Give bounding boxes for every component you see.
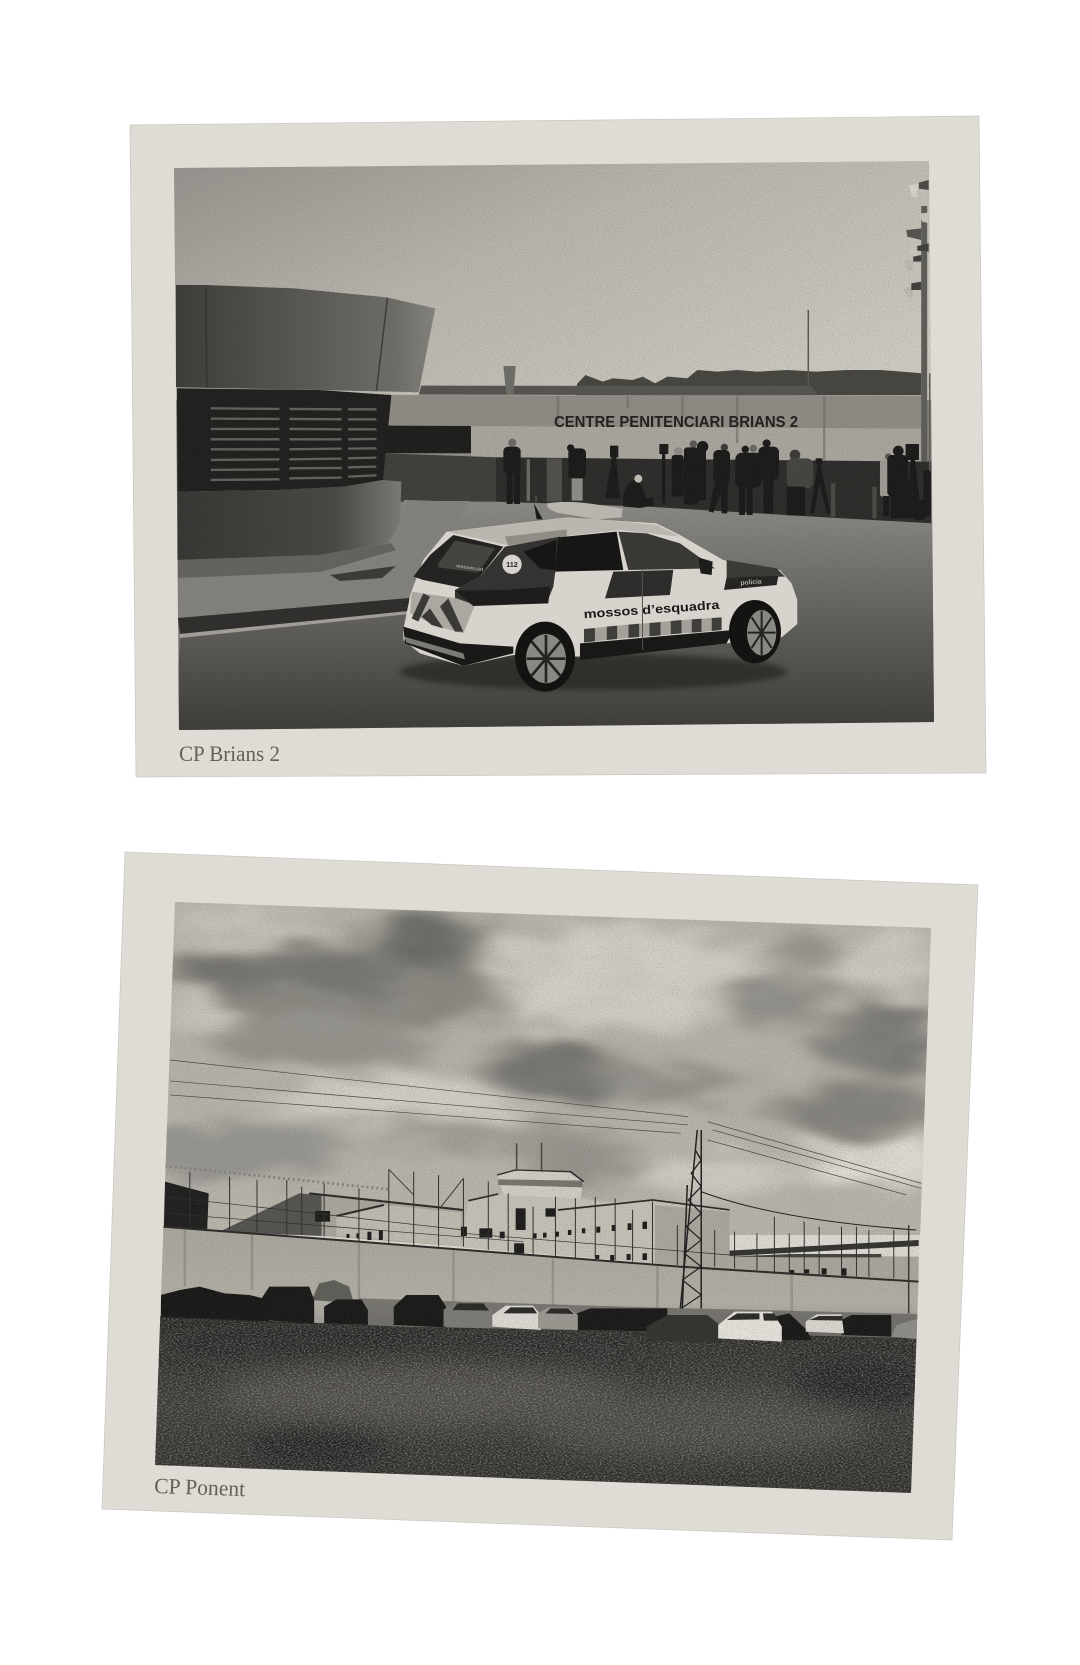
parked white car	[492, 1306, 541, 1330]
grain	[150, 895, 940, 1505]
rear wheel	[515, 622, 575, 692]
entrance dark band	[496, 457, 931, 523]
mirror	[698, 557, 713, 575]
badge: 112	[502, 555, 522, 574]
upper scene	[176, 180, 931, 523]
prison complex	[150, 1130, 919, 1497]
side window middle	[555, 532, 623, 572]
lamps	[903, 180, 929, 298]
perimeter wall	[150, 1227, 919, 1343]
ground gravel	[150, 1315, 930, 1500]
badge: 112: 112	[506, 560, 518, 569]
drum lower	[177, 480, 401, 560]
cloud texture	[542, 953, 901, 1184]
photo: Ponent prison walls under clouds	[155, 902, 931, 1493]
fence	[165, 1169, 909, 1280]
main building	[461, 1194, 730, 1269]
rear windscreen	[413, 535, 503, 587]
body	[403, 517, 797, 666]
sign: Centre Penitenciari Brians 2: CENTRE PENITENCIARI BRIANS 2	[554, 414, 798, 431]
tail light	[455, 587, 550, 606]
wall seams	[185, 1229, 792, 1312]
postcard: CP Brians 2	[130, 116, 986, 777]
clouds	[111, 907, 956, 1195]
wall stains	[558, 396, 824, 460]
ground patches	[150, 1315, 930, 1500]
parked grey car	[444, 1302, 492, 1328]
far silver car	[891, 1318, 919, 1339]
photo: Brians 2 prison entrance	[170, 155, 940, 735]
pavement	[404, 501, 470, 600]
dark window	[383, 426, 471, 453]
caption: CP Brians 2: CP Brians 2	[179, 741, 280, 766]
rear pillar dark panel	[455, 537, 560, 604]
door band	[605, 570, 673, 598]
tree line	[577, 370, 921, 395]
roof tiles	[419, 386, 818, 395]
concrete wall	[383, 395, 922, 462]
sill	[580, 630, 733, 660]
bonnet	[727, 560, 785, 577]
parked cars	[260, 1287, 919, 1343]
drum skirt	[178, 543, 396, 578]
power lines	[170, 1060, 921, 1195]
kerb	[178, 598, 409, 634]
front window	[618, 532, 715, 570]
annex roof line	[309, 1193, 463, 1216]
front dark car	[647, 1315, 722, 1343]
tail chevrons	[410, 592, 475, 633]
drum windows	[177, 388, 391, 492]
bollards	[535, 483, 877, 518]
light pole	[921, 206, 927, 462]
road	[175, 500, 940, 735]
chimney	[503, 366, 516, 395]
checker strip	[584, 617, 722, 642]
bonnet label: policia	[740, 579, 762, 587]
door line	[641, 570, 644, 650]
grain	[170, 155, 940, 735]
sky	[170, 155, 940, 405]
lower base	[170, 400, 940, 735]
rear window label: mossos.cat	[456, 563, 484, 573]
parked silver car	[538, 1307, 578, 1330]
patch group	[150, 1335, 930, 1467]
right building	[730, 1255, 919, 1281]
pylon	[680, 1130, 916, 1308]
left annex front	[322, 1195, 463, 1247]
black block	[164, 1182, 209, 1229]
dark cloud masses	[111, 907, 941, 1192]
people	[503, 439, 931, 520]
journalists and cameras	[503, 439, 931, 520]
light bar	[547, 502, 623, 519]
lower drum shell	[177, 480, 401, 560]
roof	[447, 517, 680, 545]
bush	[312, 1280, 354, 1303]
right wing shaded face	[655, 1205, 730, 1269]
far white car	[806, 1314, 844, 1333]
car windows	[452, 1303, 843, 1321]
vegetation	[161, 1287, 269, 1323]
antennas	[517, 1143, 542, 1171]
slats	[211, 408, 376, 480]
antenna	[534, 503, 543, 519]
windows	[315, 1208, 846, 1276]
razor wire	[165, 1166, 389, 1189]
card paper	[102, 852, 978, 1540]
sky base	[150, 895, 940, 1235]
card paper	[130, 116, 986, 777]
brick base	[383, 453, 496, 502]
front white car	[718, 1312, 782, 1342]
parked dark cars	[260, 1287, 891, 1340]
drum upper	[176, 285, 435, 392]
caption: CP Ponent: CP Ponent	[154, 1473, 246, 1501]
lettering: mossos d'esquadra: mossos d’esquadra	[583, 598, 720, 621]
light cloud masses	[165, 908, 956, 1195]
floodlight	[907, 1225, 910, 1313]
front wheel	[729, 600, 781, 663]
police car	[400, 502, 797, 692]
side window rear	[523, 540, 557, 570]
ground	[150, 1316, 919, 1497]
lit wall pieces	[547, 458, 562, 502]
drain grate	[330, 566, 396, 581]
left annex fence side	[220, 1193, 322, 1236]
dark base of wall behind cars	[359, 1298, 919, 1343]
mast	[808, 310, 810, 386]
bumper	[403, 627, 513, 666]
tower	[497, 1170, 584, 1198]
car shadow	[400, 653, 787, 690]
postcard: CP Ponent	[102, 852, 978, 1540]
